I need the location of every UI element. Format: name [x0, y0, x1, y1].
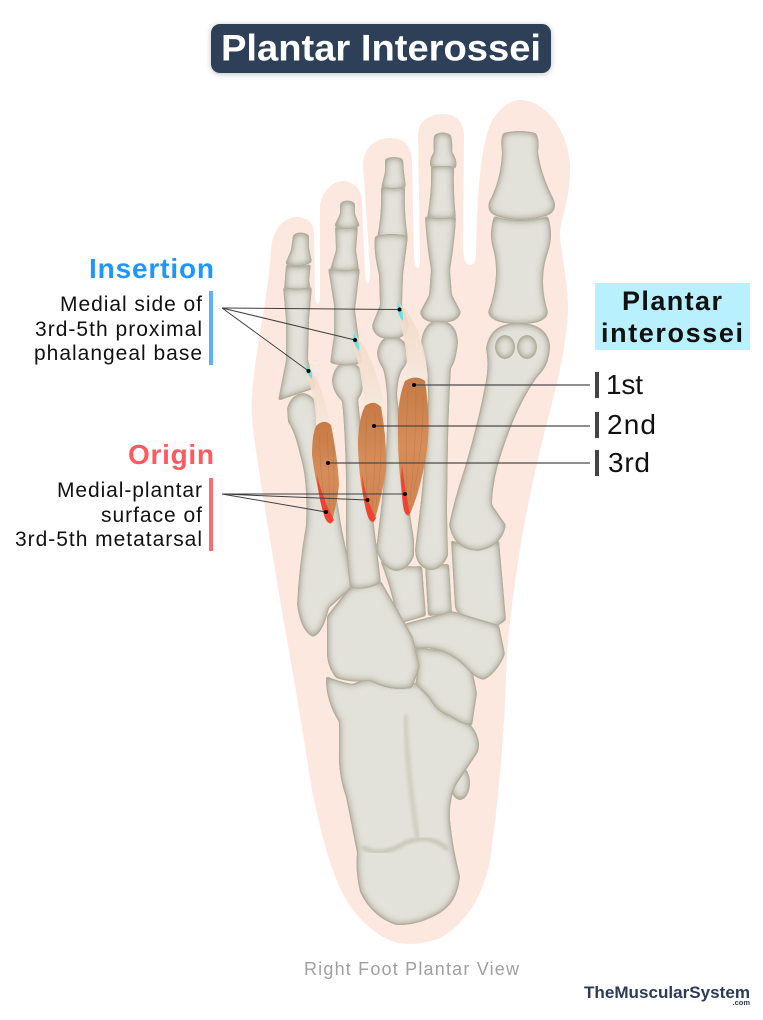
bone: 1st metatarsal — [449, 323, 550, 551]
bone: toe 2 distal — [430, 132, 456, 170]
origin description: Medial-plantar — [57, 479, 202, 502]
muscle: 3rd — [312, 422, 339, 524]
bone: toe 4 proximal — [328, 268, 362, 366]
bone: 2nd metatarsal — [415, 320, 458, 570]
origin description: surface of — [101, 504, 202, 527]
insertion heading: Insertion — [89, 253, 214, 284]
insertion: 3rd — [307, 364, 312, 379]
bone: toe 5 proximal — [278, 287, 316, 401]
insertion: 1st — [398, 302, 403, 321]
bone: toe 4 distal — [334, 200, 360, 230]
bone: toe 4 middle — [330, 226, 359, 272]
calcaneus central ridge — [405, 715, 418, 840]
bone: 3rd metatarsal — [376, 336, 414, 571]
bone: cuboid — [327, 581, 420, 689]
bone: 5th metatarsal — [287, 393, 354, 637]
label: 2nd: 2nd — [607, 409, 656, 440]
tendon: 3rd — [306, 365, 330, 426]
calcaneus tuber ridge — [362, 839, 448, 852]
muscle: 2nd — [358, 403, 386, 522]
bone: toe 5 middle — [284, 264, 311, 291]
bone: medial cuneiform — [451, 540, 506, 628]
insertion description: Medial side of — [60, 293, 202, 316]
bone: 4th metatarsal — [332, 362, 381, 589]
muscle: 1st — [398, 378, 429, 516]
bone: middle cuneiform — [425, 564, 452, 616]
bone: talus head — [414, 646, 477, 726]
bone: sesamoid left — [495, 335, 515, 359]
legend: plantar interossei: interossei — [601, 318, 743, 348]
origin: 1st — [401, 465, 410, 515]
bone: toe 3 proximal — [372, 234, 409, 339]
bone: lateral cuneiform — [380, 560, 426, 624]
origin heading: Origin — [128, 439, 214, 470]
insertion bar — [209, 291, 213, 365]
bone: toe 3 distal — [381, 157, 406, 191]
label: 1st: 1st — [606, 369, 643, 400]
leader dots — [306, 308, 416, 514]
insertion leader lines — [222, 308, 400, 371]
origin bar — [209, 478, 213, 551]
logo: .com — [732, 998, 750, 1007]
muscle fibre streaks — [320, 390, 423, 515]
origin description — [15, 479, 202, 551]
label: 3rd: 3rd — [608, 447, 650, 478]
bone: toe 2 proximal — [420, 216, 461, 322]
caption: Right Foot Plantar View — [304, 959, 520, 979]
bone: big toe proximal phalanx — [488, 216, 551, 324]
bone: big toe distal phalanx — [488, 131, 555, 220]
tendon: 1st — [397, 303, 428, 380]
insertion description: phalangeal base — [34, 342, 202, 365]
bone: sesamoid right — [517, 335, 537, 359]
origin: 3rd — [317, 475, 334, 523]
logo: TheMuscularSystem — [584, 983, 750, 1002]
foot skeleton — [278, 131, 555, 925]
title: Plantar Interossei — [221, 28, 541, 68]
legend: plantar interossei: Plantar — [622, 286, 722, 316]
muscle leader lines — [328, 385, 590, 463]
origin leader lines — [222, 494, 405, 512]
foot skin silhouette — [252, 100, 570, 944]
bone: accessory sesamoid behind calcaneus — [450, 766, 470, 800]
origin: 2nd — [362, 475, 376, 522]
bone: navicular — [400, 611, 505, 680]
insertion description: 3rd-5th proximal — [35, 318, 202, 341]
insertion: 2nd — [354, 333, 359, 351]
bone: calcaneus — [326, 676, 479, 925]
bone: toe 3 middle — [377, 186, 408, 240]
bone: toe 2 middle — [427, 166, 456, 220]
bone: toe 5 distal — [285, 232, 312, 267]
origin description: 3rd-5th metatarsal — [15, 528, 202, 551]
insertion description — [34, 293, 202, 365]
legend: plantar interossei — [595, 283, 750, 350]
tendon: 2nd — [353, 334, 384, 406]
plantar interossei muscles — [306, 302, 429, 524]
